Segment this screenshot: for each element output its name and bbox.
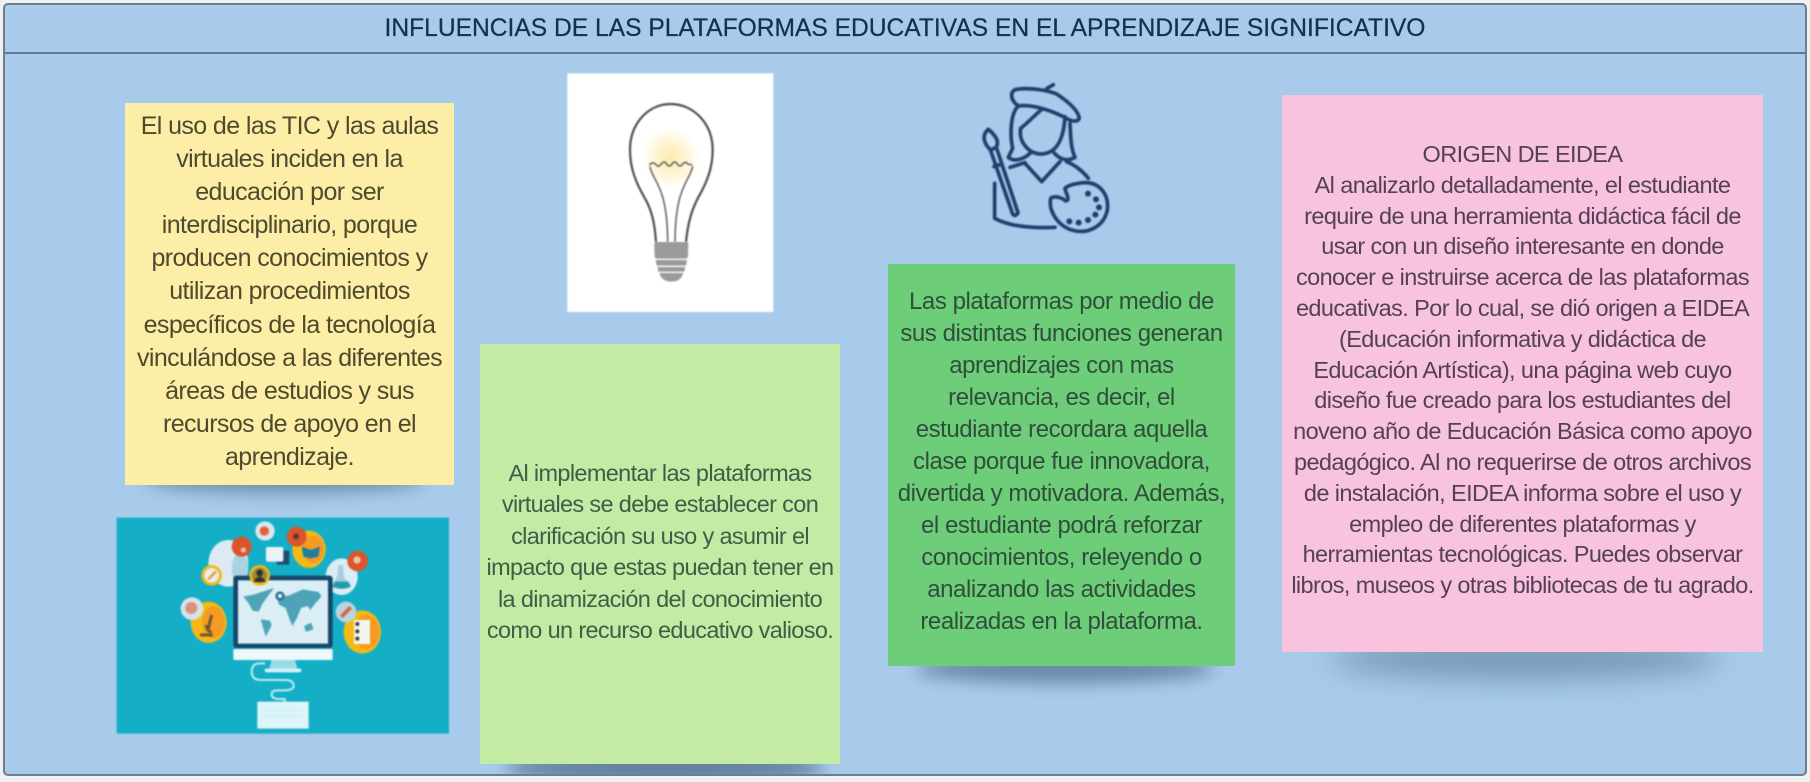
panel: yellow text: áreas de estudios y sus: [165, 377, 414, 405]
image: light bulb: [566, 72, 774, 313]
bulb glass: [630, 104, 713, 242]
panel: yellow text: vinculándose a las diferentes: [137, 344, 442, 372]
shadow: yellow panel: [145, 467, 425, 493]
panel: yellow text: recursos de apoyo en el: [163, 410, 416, 438]
panel: pink text: [1282, 95, 1763, 652]
panel: yellow text: educación por ser: [195, 178, 384, 206]
panel: yellow text: utilizan procedimientos: [169, 277, 410, 305]
panel: green text: realizadas en la plataforma.: [920, 608, 1203, 635]
icon: top-left globe bubble: [201, 537, 252, 587]
panel: light green text: la dinamización del conocimiento: [498, 586, 822, 612]
panel: pink text: educativas. Por lo cual, se dió origen a EIDEA: [1296, 295, 1749, 321]
filament: [649, 162, 693, 242]
panel: yellow text: producen conocimientos y: [151, 244, 428, 272]
panel: green text: relevancia, es decir, el: [948, 384, 1175, 411]
panel: green text: clase porque fue innovadora,: [913, 448, 1210, 475]
panel: light green text: [480, 344, 840, 764]
shadow: light green panel: [505, 753, 825, 782]
panel: green text: conocimientos, releyendo o: [921, 544, 1202, 571]
panel: green text: el estudiante podrá reforzar: [921, 512, 1202, 539]
panel: pink text: Al analizarlo detalladamente, el estudiante: [1315, 172, 1730, 198]
panel: pink text: de instalación, EIDEA informa sobre el uso y: [1304, 480, 1741, 506]
panel: pink text: herramientas tecnológicas. Puedes observar: [1303, 541, 1742, 567]
icon: flask bubble: [326, 551, 368, 595]
title: [5, 5, 1805, 54]
icon: keyboard: [257, 702, 309, 729]
panel: yellow text: específicos de la tecnología: [144, 311, 435, 339]
panel: pink text: usar con un diseño interesante en donde: [1321, 233, 1724, 259]
panel: green text: estudiante recordara aquella: [916, 416, 1207, 443]
panel: yellow text: [125, 103, 454, 485]
panel: pink text: empleo de diferentes plataformas y: [1349, 511, 1696, 537]
panel: light green text: como un recurso educativo valioso.: [487, 617, 833, 643]
panel: green text: Las plataformas por medio de: [909, 288, 1214, 315]
panel: pink text: pedagógico. Al no requerirse de otros archivos: [1294, 449, 1751, 475]
icon: checklist bubble: [336, 602, 381, 654]
panel: pink text: conocer e instruirse acerca de las plataformas: [1296, 264, 1749, 290]
panel: light green text: clarificación su uso y asumir el: [511, 523, 809, 549]
icon: microscope bubble: [181, 597, 227, 643]
panel: light green text: impacto que estas puedan tener en: [486, 554, 833, 580]
icon: cable: [252, 663, 294, 703]
icon: speech bubbles: [266, 547, 289, 565]
panel: yellow text: interdisciplinario, porque: [162, 211, 417, 239]
panel: light green text: virtuales se debe establecer con: [502, 491, 818, 517]
panel: pink text: Educación Artística), una página web cuyo: [1313, 357, 1732, 383]
panel: yellow text: virtuales inciden en la: [176, 145, 403, 173]
panel: green text: sus distintas funciones generan: [900, 320, 1223, 347]
panel: pink text: diseño fue creado para los estudiantes del: [1314, 387, 1731, 413]
icon: computer monitor: [233, 565, 333, 672]
panel: pink text: ORIGEN DE EIDEA: [1423, 141, 1622, 167]
panel: pink text: (Educación informativa y didáctica de: [1339, 326, 1706, 352]
shadow: pink panel: [1330, 637, 1720, 679]
panel: yellow text: El uso de las TIC y las aulas: [141, 112, 438, 140]
panel: pink text: noveno año de Educación Básica como apoyo: [1293, 418, 1752, 444]
panel: yellow text: aprendizaje.: [225, 443, 354, 471]
bulb base: [654, 242, 688, 282]
panel: pink text: libros, museos y otras bibliotecas de tu agrado.: [1291, 572, 1754, 598]
panel: green text: aprendizajes con mas: [949, 352, 1174, 379]
panel: green text: analizando las actividades: [927, 576, 1196, 603]
panel: green text: [888, 264, 1235, 666]
icon: book bubble: [287, 527, 326, 568]
panel: pink text: require de una herramienta didáctica fácil de: [1304, 203, 1741, 229]
panel: light green text: Al implementar las plataformas: [508, 460, 812, 486]
shadow: green panel: [915, 655, 1215, 683]
icon: artist with beret, brush and palette: [981, 82, 1110, 234]
title: INFLUENCIAS DE LAS PLATAFORMAS EDUCATIVAS EN EL APRENDIZAJE SIGNIFICATIVO: [385, 15, 1425, 42]
panel: green text: divertida y motivadora. Además,: [898, 480, 1225, 507]
icon: top small bubble: [255, 521, 275, 541]
image: computer with education icons: [116, 516, 450, 735]
